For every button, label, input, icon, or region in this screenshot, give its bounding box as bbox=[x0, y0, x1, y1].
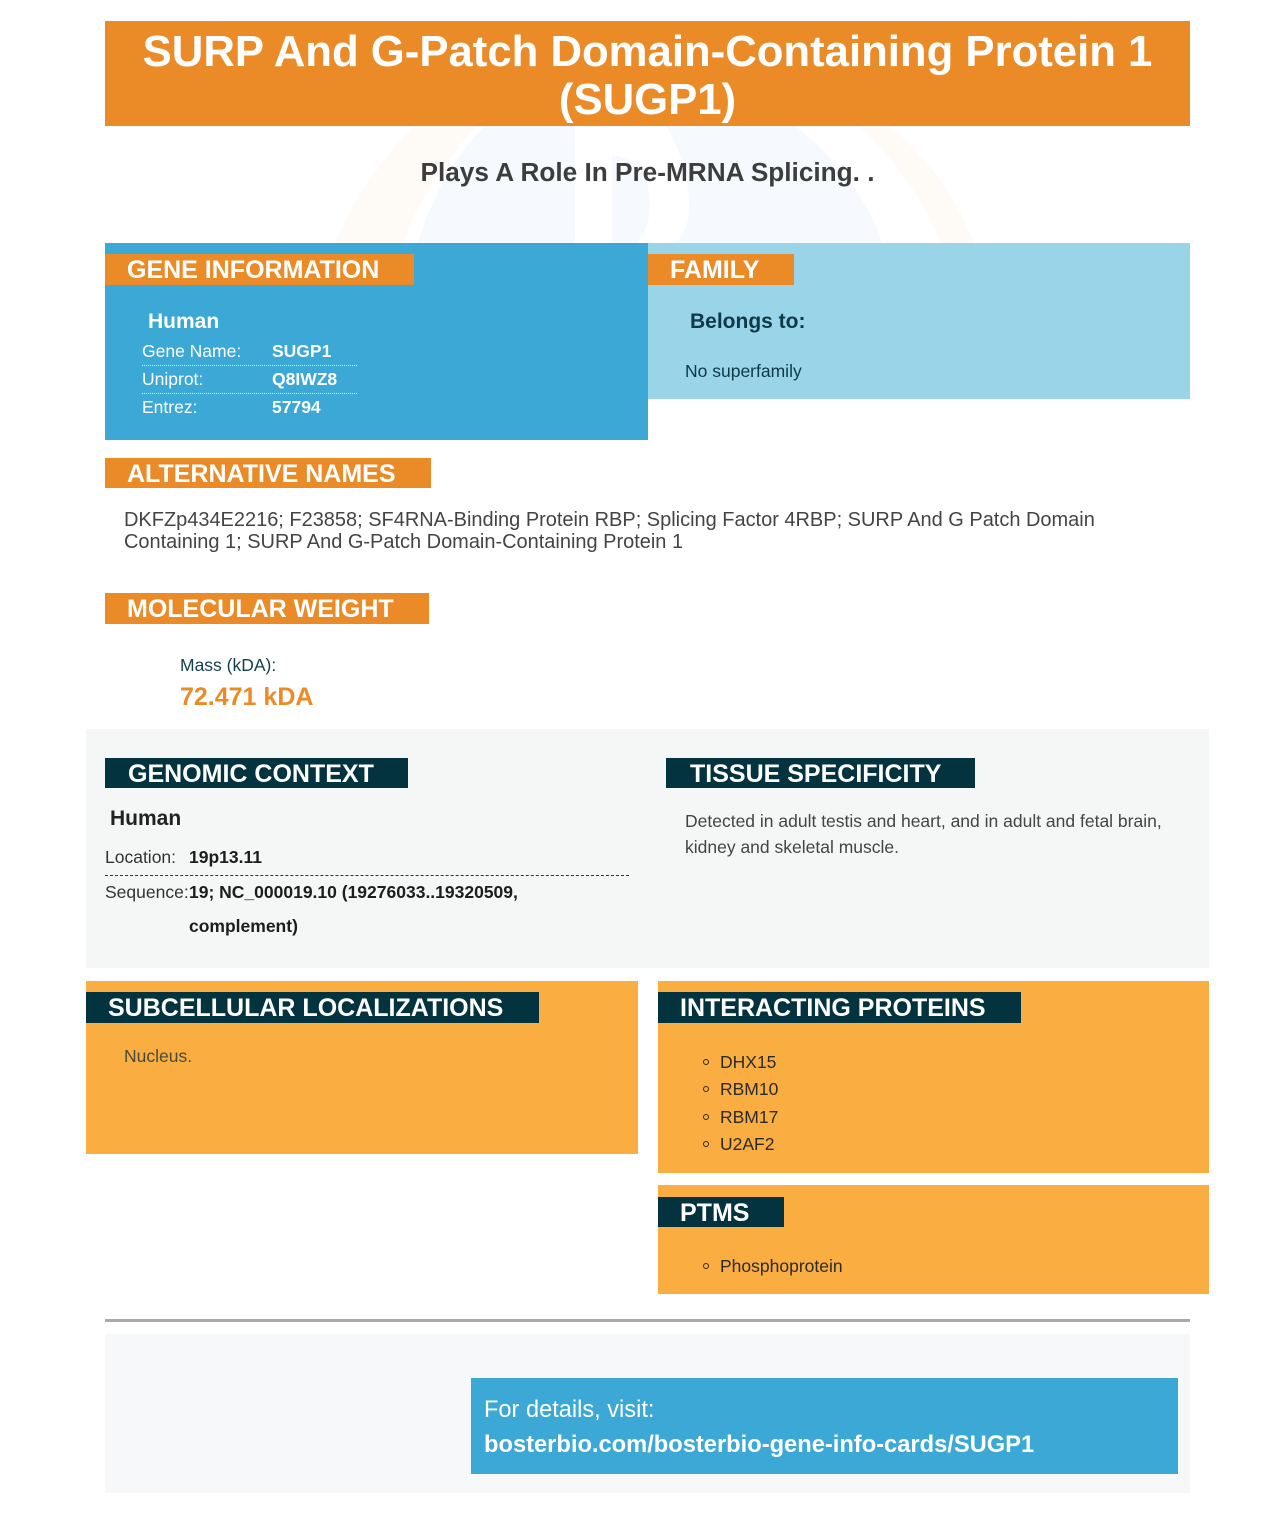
heading: interacting proteins: INTERACTING PROTEINS bbox=[680, 994, 986, 1022]
title banner bbox=[105, 21, 1190, 126]
protein list bbox=[703, 1052, 778, 1154]
sequence row bbox=[105, 882, 518, 936]
gene info table: Q8IWZ8 bbox=[272, 369, 337, 389]
heading: genomic context: GENOMIC CONTEXT bbox=[128, 760, 374, 788]
mass label: Mass (kDA): bbox=[180, 655, 276, 675]
heading: tissue specificity: TISSUE SPECIFICITY bbox=[690, 760, 941, 788]
heading: PTMs: PTMS bbox=[680, 1199, 749, 1227]
heading: family: FAMILY bbox=[670, 256, 759, 284]
heading: molecular weight: MOLECULAR WEIGHT bbox=[127, 595, 394, 623]
panel: genomic context and tissue specificity bbox=[86, 729, 1209, 968]
gene info table bbox=[142, 341, 357, 417]
belongs to label: Belongs to: bbox=[690, 310, 806, 333]
background watermark logo bbox=[336, 126, 974, 243]
sequence row: complement) bbox=[189, 916, 298, 936]
heading: gene information: GENE INFORMATION bbox=[127, 256, 379, 284]
protein list: RBM10 bbox=[720, 1079, 778, 1099]
callout label: For details, visit: bbox=[484, 1397, 654, 1423]
panel: interacting proteins bbox=[658, 981, 1209, 1173]
heading: subcellular localizations: SUBCELLULAR LOCALIZATIONS bbox=[108, 994, 503, 1022]
callout url: bosterbio.com/bosterbio-gene-info-cards/SUGP1 bbox=[484, 1432, 1034, 1458]
protein list: RBM17 bbox=[720, 1107, 778, 1127]
sequence row: 19; NC_000019.10 (19276033..19320509, bbox=[189, 882, 518, 902]
title banner: SURP And G-Patch Domain-Containing Protein 1 bbox=[143, 27, 1152, 76]
gene info table: Gene Name: bbox=[142, 341, 241, 361]
alternative names text: Containing 1; SURP And G-Patch Domain-Containing Protein 1 bbox=[124, 531, 683, 553]
alternative names text: DKFZp434E2216; F23858; SF4RNA-Binding Protein RBP; Splicing Factor 4RBP; SURP And G Patch Domain bbox=[124, 509, 1095, 531]
location row: 19p13.11 bbox=[189, 847, 262, 867]
tissue specificity text: kidney and skeletal muscle. bbox=[685, 837, 899, 857]
tissue specificity text bbox=[685, 811, 1162, 857]
panel: subcellular localizations bbox=[86, 981, 638, 1154]
gene info table: Uniprot: bbox=[142, 369, 203, 389]
heading: PTMs bbox=[658, 1197, 784, 1227]
heading: family bbox=[648, 254, 794, 285]
location row bbox=[105, 845, 629, 876]
PTM list: Phosphoprotein bbox=[720, 1256, 843, 1276]
alternative names text bbox=[124, 509, 1095, 553]
species label: Human bbox=[148, 310, 219, 333]
tissue specificity text: Detected in adult testis and heart, and in adult and fetal brain, bbox=[685, 811, 1162, 831]
panel: footer bbox=[105, 1334, 1190, 1493]
panel: family bbox=[648, 243, 1190, 399]
mass value: 72.471 kDA bbox=[180, 683, 313, 711]
gene info table: SUGP1 bbox=[272, 341, 331, 361]
protein list: U2AF2 bbox=[720, 1134, 774, 1154]
gene info table: 57794 bbox=[272, 397, 321, 417]
species label: Human bbox=[110, 807, 181, 830]
localization text: Nucleus. bbox=[124, 1046, 192, 1066]
subtitle: Plays A Role In Pre-MRNA Splicing. . bbox=[420, 157, 874, 187]
location row: Location: bbox=[105, 847, 176, 867]
panel: gene information bbox=[105, 243, 648, 440]
sequence row: Sequence: bbox=[105, 882, 189, 902]
callout: details link bbox=[471, 1378, 1178, 1474]
family value: No superfamily bbox=[685, 361, 802, 381]
heading: alternative names: ALTERNATIVE NAMES bbox=[127, 460, 396, 488]
panel: PTMs bbox=[658, 1185, 1209, 1294]
title banner: (SUGP1) bbox=[559, 75, 736, 124]
protein list: DHX15 bbox=[720, 1052, 776, 1072]
gene info table: Entrez: bbox=[142, 397, 197, 417]
